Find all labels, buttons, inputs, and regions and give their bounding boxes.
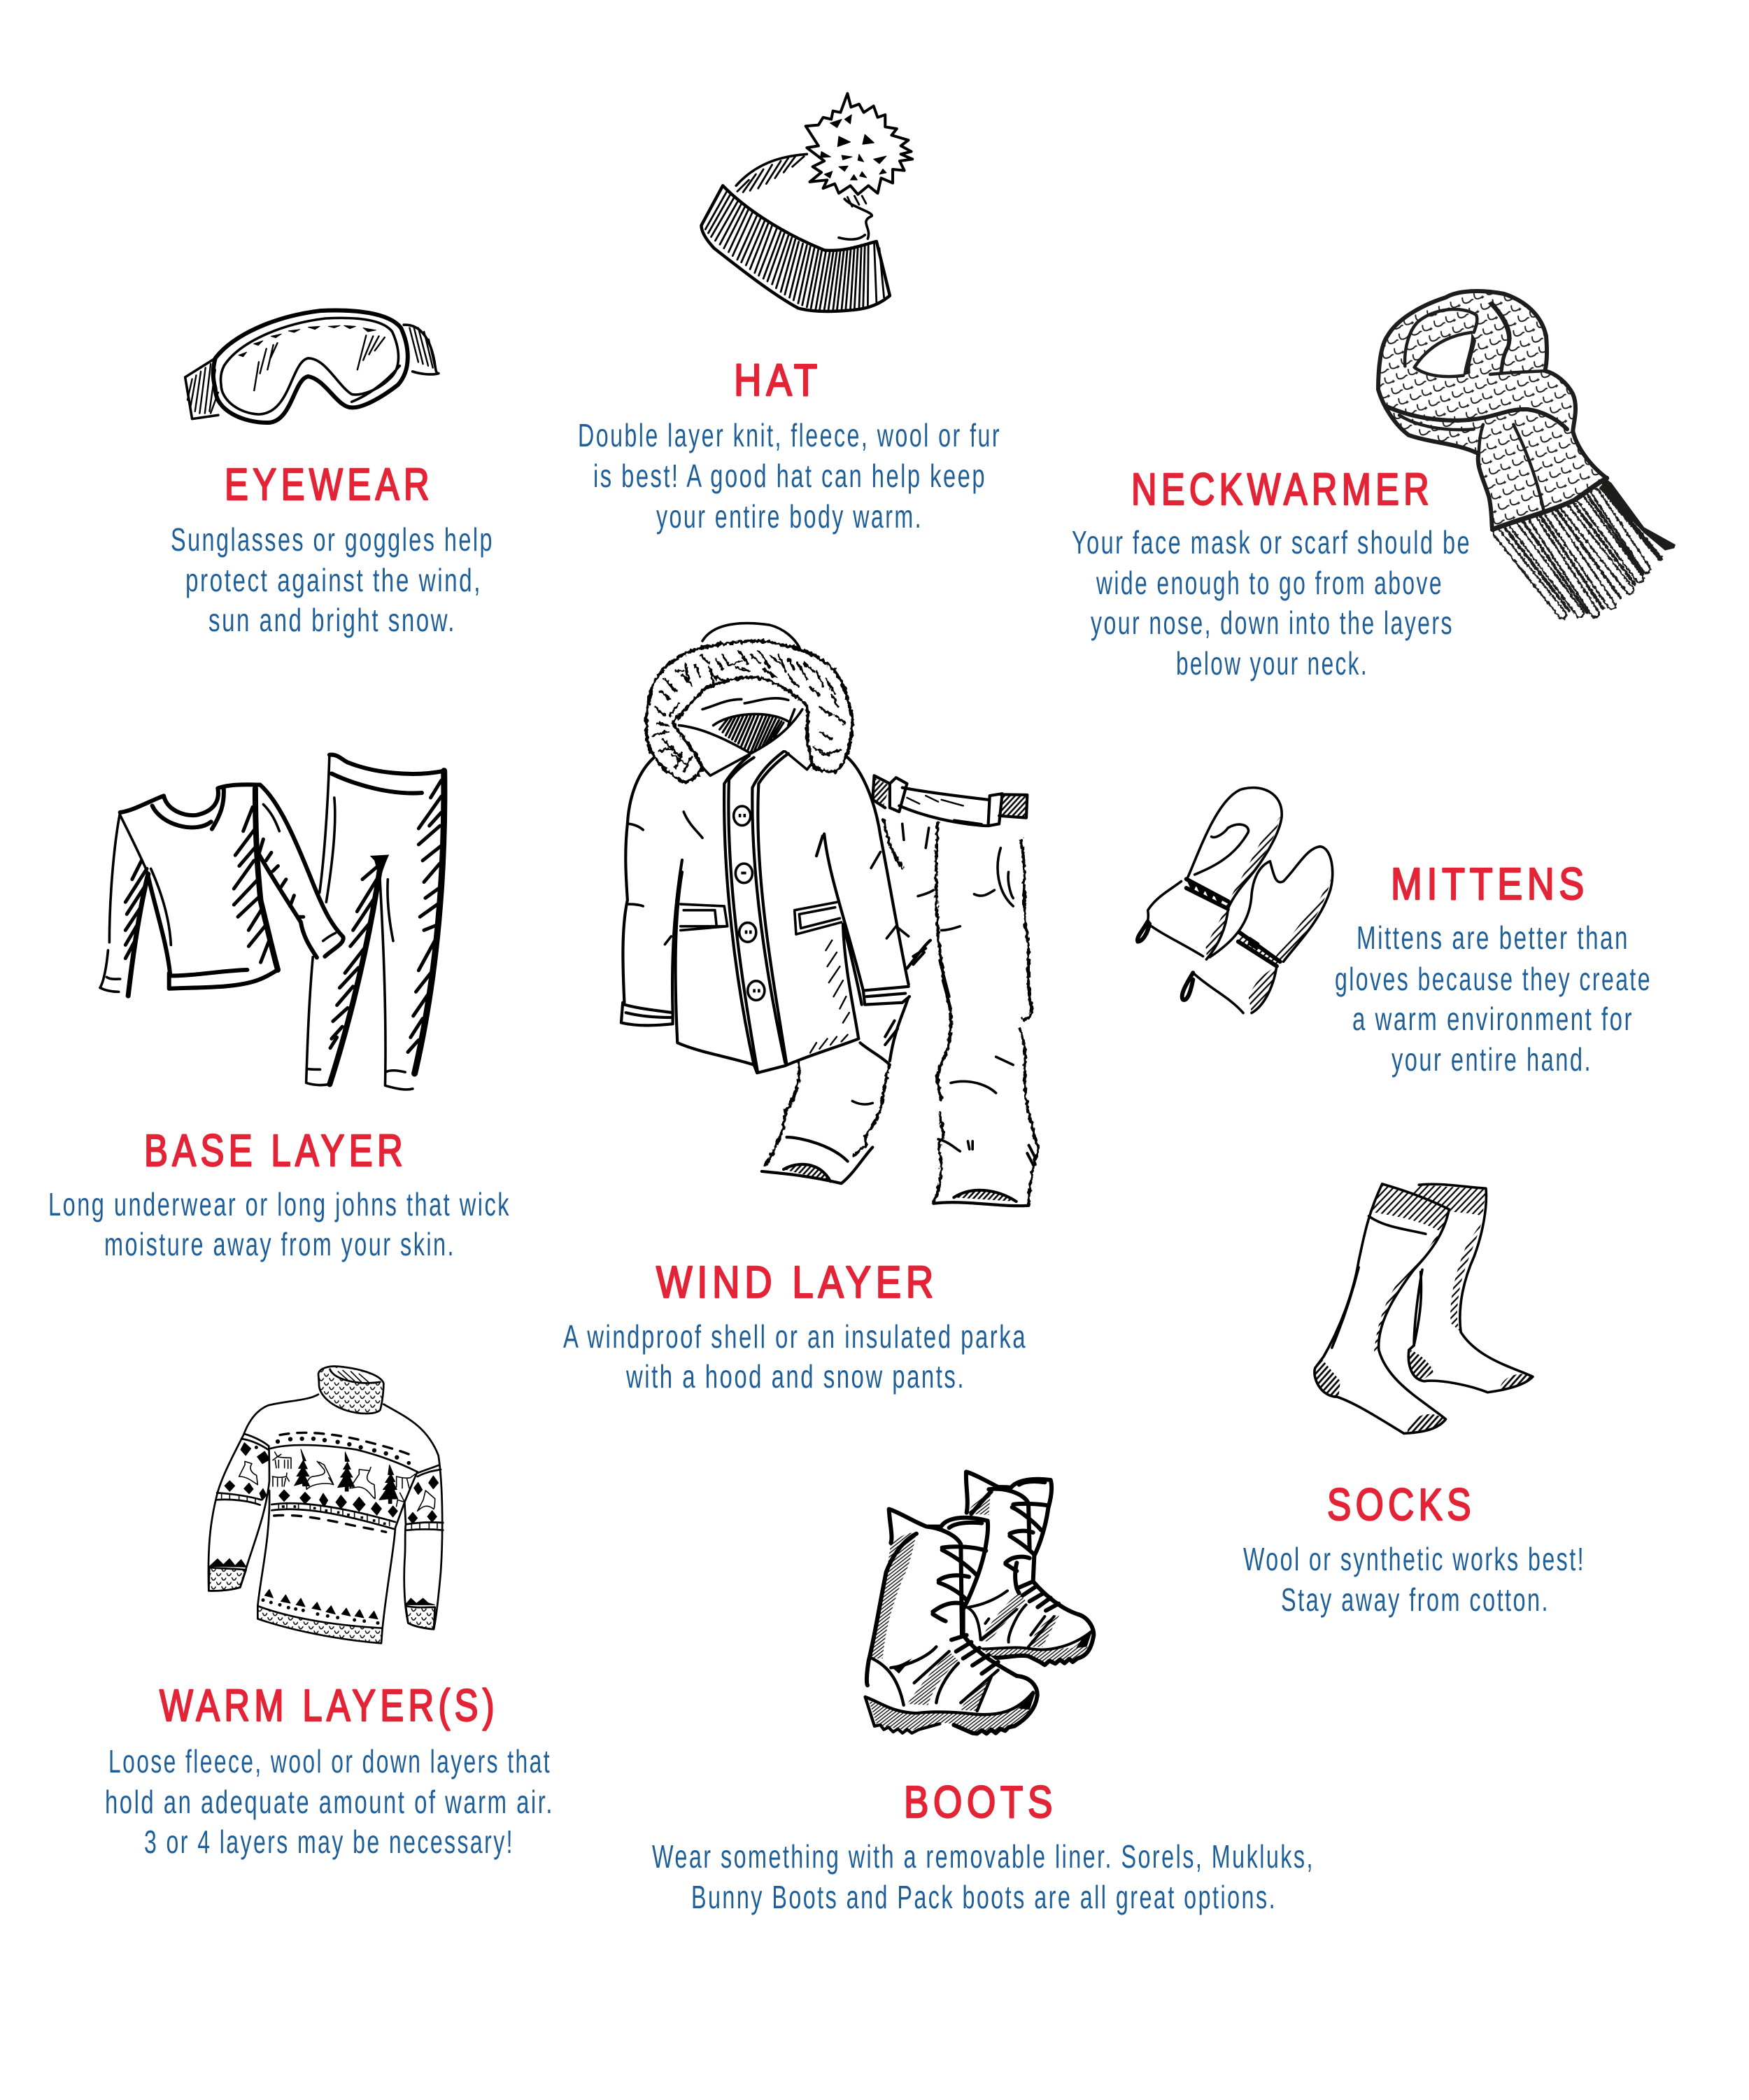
text block: base layer: Long underwear or long johns that wick [48,1186,511,1222]
icon: parka and snow pants [621,623,1038,1206]
heading: wind layer: WIND LAYER [656,1257,938,1307]
text block: base layer [48,1186,511,1262]
panel: socks [1243,1184,1585,1618]
text block: mittens: your entire hand. [1392,1041,1592,1078]
text block: warm layers: 3 or 4 layers may be necessary! [144,1824,514,1860]
text block: hat: Double layer knit, fleece, wool or fur [578,417,1001,453]
back boot [966,1472,1093,1665]
panel: mittens [1138,788,1652,1078]
panel: hat [578,94,1001,535]
text block: socks [1243,1541,1585,1618]
text block: neckwarmer [1072,524,1471,682]
icon: goggles [185,311,439,423]
icon: socks [1315,1184,1533,1433]
text block: socks: Wool or synthetic works best! [1243,1541,1585,1577]
panel: eyewear [171,311,494,638]
panel: boots [652,1472,1315,1915]
text block: wind layer: with a hood and snow pants. [625,1358,965,1395]
icon: long underwear [100,754,444,1090]
text block: boots [652,1838,1315,1915]
text block: mittens: Mittens are better than [1357,919,1629,956]
text block: neckwarmer: Your face mask or scarf should be [1072,524,1471,561]
snow pants [762,775,1038,1206]
panel: neckwarmer [1072,291,1676,682]
panel: warm layers [105,1366,554,1860]
text block: boots: Bunny Boots and Pack boots are all great options. [691,1879,1277,1915]
heading: eyewear: EYEWEAR [225,459,434,509]
text block: hat: your entire body warm. [656,498,923,535]
text block: eyewear: Sunglasses or goggles help [171,521,494,558]
text block: mittens [1335,919,1652,1078]
icon: bobble hat [701,94,912,311]
text block: hat: is best! A good hat can help keep [593,458,986,494]
heading: boots: BOOTS [904,1777,1057,1827]
heading: warm layers: WARM LAYER(S) [160,1680,499,1731]
text block: eyewear: sun and bright snow. [208,602,456,638]
text block: mittens: a warm environment for [1352,1001,1634,1037]
icon: knit scarf [1378,291,1676,614]
heading: base layer: BASE LAYER [144,1125,407,1176]
panel: base layer [48,754,511,1262]
text block: wind layer [563,1318,1027,1395]
text block: eyewear: protect against the wind, [185,562,482,598]
long-sleeve shirt [100,784,344,996]
heading: hat: HAT [734,355,822,405]
text block: neckwarmer: your nose, down into the layers [1091,605,1454,641]
text block: warm layers [105,1743,554,1860]
text block: base layer: moisture away from your skin. [104,1226,455,1262]
heading: mittens: MITTENS [1391,859,1589,909]
heading: neckwarmer: NECKWARMER [1131,464,1433,514]
text block: hat [578,417,1001,535]
text block: neckwarmer: wide enough to go from above [1096,565,1443,601]
text block: boots: Wear something with a removable liner. Sorels, Mukluks, [652,1838,1315,1875]
text block: neckwarmer: below your neck. [1176,645,1368,682]
panel: wind layer [563,623,1038,1395]
text block: socks: Stay away from cotton. [1281,1581,1550,1618]
text block: warm layers: hold an adequate amount of warm air. [105,1784,554,1820]
text block: warm layers: Loose fleece, wool or down layers that [108,1743,551,1780]
text block: wind layer: A windproof shell or an insulated parka [563,1318,1027,1355]
icon: fair isle sweater [208,1366,443,1643]
long johns [306,754,444,1090]
heading: socks: SOCKS [1327,1479,1475,1530]
parka [621,623,909,1073]
icon: lace-up boots [865,1472,1093,1733]
front boot [865,1509,1038,1733]
icon: mittens [1138,788,1333,1013]
text block: eyewear [171,521,494,638]
